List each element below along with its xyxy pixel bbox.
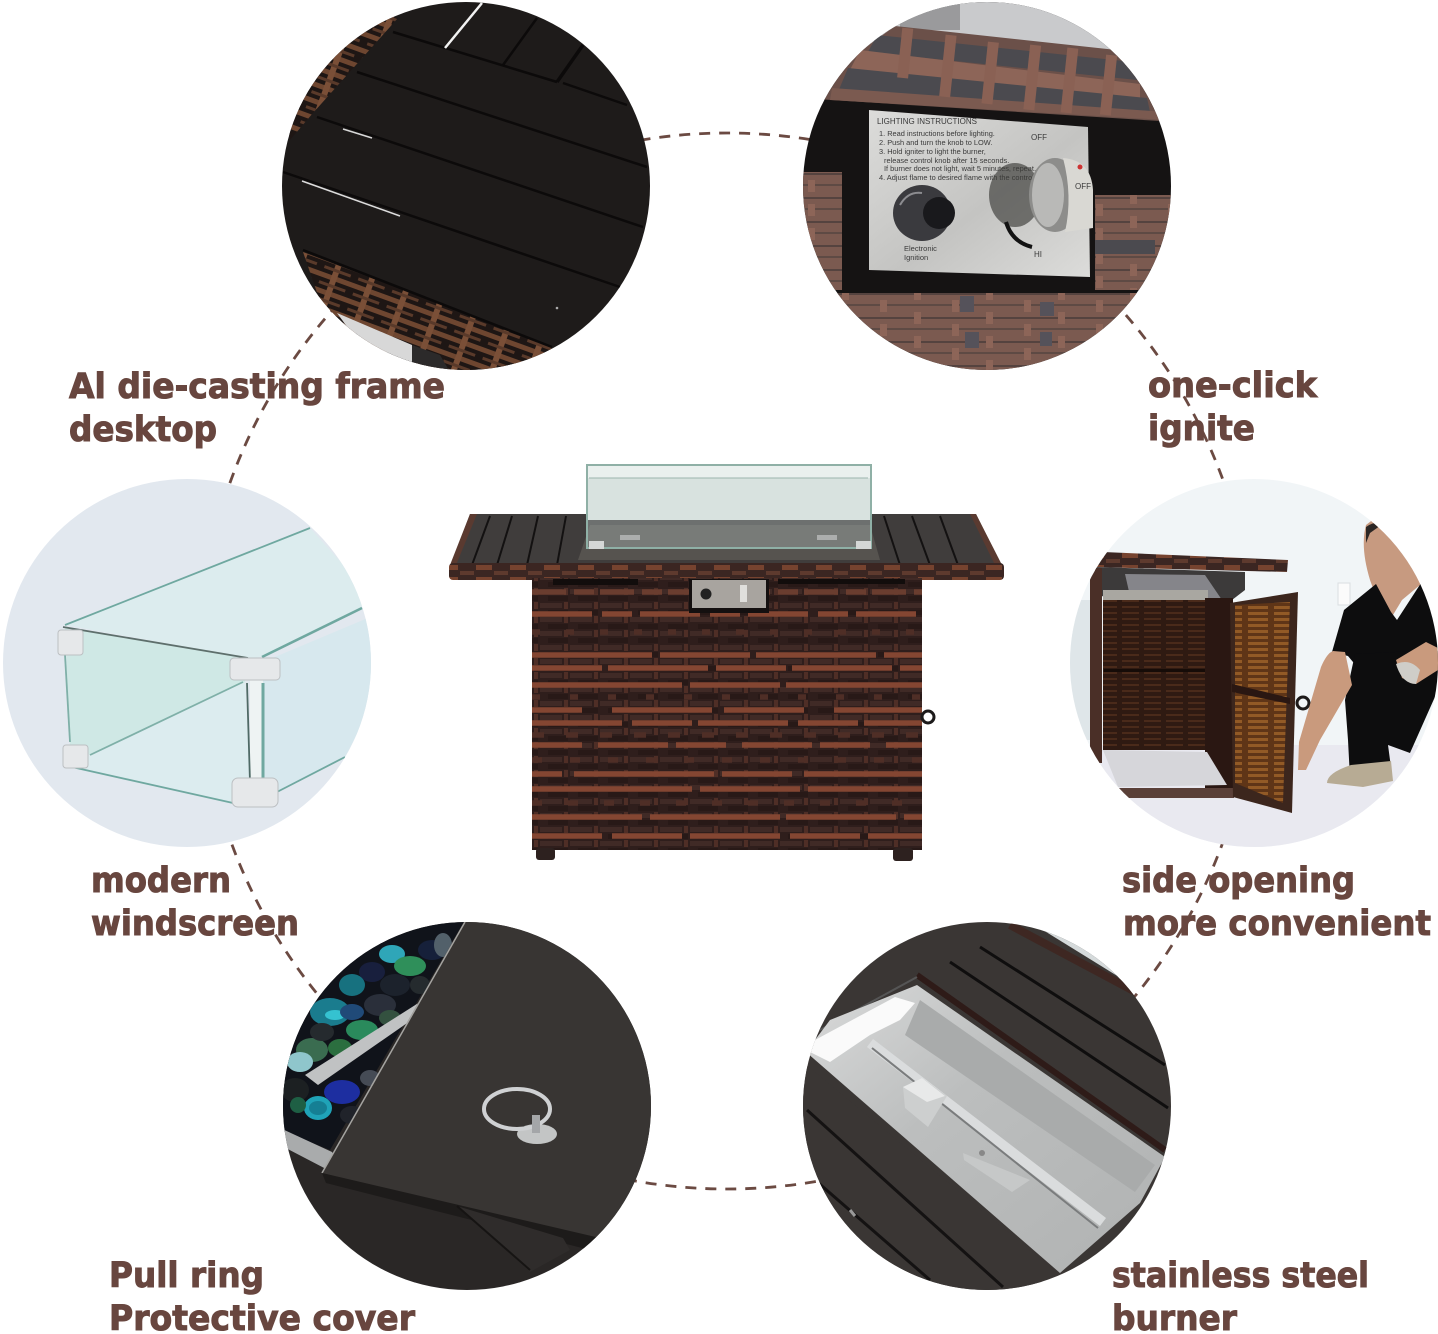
photo: one-click ignition panel bbox=[800, 0, 1175, 375]
lighting instructions plate text: LIGHTING INSTRUCTIONS bbox=[877, 117, 977, 126]
upper wicker bbox=[824, 26, 1159, 121]
label: stainless steel burner: stainless steel bbox=[1112, 1256, 1369, 1296]
control dial: OFF bbox=[1075, 182, 1091, 191]
lighting instructions plate text: Electronic bbox=[904, 244, 937, 253]
photo: side opening door bbox=[1065, 475, 1438, 850]
lighting instructions plate text: If burner does not light, wait 5 minutes, repeat. bbox=[884, 164, 1036, 173]
corner clips bbox=[58, 630, 280, 807]
lighting instructions plate text: 1. Read instructions before lighting. bbox=[879, 129, 995, 138]
lighting instructions plate text: 4. Adjust flame to desired flame with the control. bbox=[879, 173, 1036, 182]
control dial bbox=[989, 158, 1093, 247]
lighting instructions plate text: Ignition bbox=[904, 253, 928, 262]
pull ring bbox=[484, 1089, 557, 1144]
table top slats bbox=[450, 514, 1002, 567]
label: side opening more convenient: side opening bbox=[1122, 861, 1355, 901]
label: side opening more convenient bbox=[1122, 861, 1431, 944]
lighting instructions plate text bbox=[877, 117, 1047, 262]
central product: wicker fire pit table bbox=[449, 465, 1004, 861]
control panel bbox=[689, 579, 769, 613]
person bbox=[1298, 500, 1438, 787]
glass faces bbox=[65, 564, 371, 790]
lighting instructions plate text: HI bbox=[1034, 250, 1042, 259]
label: Al die-casting frame desktop bbox=[69, 367, 445, 450]
label: one-click ignite: one-click bbox=[1148, 366, 1318, 406]
lighting instructions plate text: 3. Hold igniter to light the burner, bbox=[879, 147, 986, 156]
burner tube bbox=[870, 1043, 1103, 1228]
right foot bbox=[893, 848, 913, 861]
glass windscreen on table bbox=[587, 465, 871, 549]
lighting instructions plate text: OFF bbox=[1031, 133, 1047, 142]
wicker body bbox=[532, 578, 922, 850]
label: Pull ring Protective cover: Pull ring bbox=[109, 1256, 264, 1296]
label: Al die-casting frame desktop: desktop bbox=[69, 410, 217, 450]
ignition button bbox=[893, 185, 955, 241]
dashed connecting ring bbox=[199, 133, 1255, 1189]
left foot bbox=[536, 848, 555, 860]
label: modern windscreen: modern bbox=[91, 861, 231, 901]
lighting instructions plate text: 2. Push and turn the knob to LOW. bbox=[879, 138, 992, 147]
photo: aluminium die-cast table top bbox=[280, 0, 652, 375]
photo: pull ring protective cover bbox=[280, 920, 655, 1295]
cabinet bbox=[1090, 552, 1309, 813]
lighting instructions plate text: release control knob after 15 seconds. bbox=[884, 156, 1009, 165]
label: Al die-casting frame desktop: Al die-casting frame bbox=[69, 367, 445, 407]
label: one-click ignite bbox=[1148, 366, 1318, 449]
label: Pull ring Protective cover bbox=[109, 1256, 416, 1334]
photo: stainless steel burner bbox=[800, 920, 1180, 1300]
label: one-click ignite: ignite bbox=[1148, 409, 1255, 449]
label: modern windscreen bbox=[91, 861, 299, 944]
label: stainless steel burner bbox=[1112, 1256, 1369, 1334]
label: modern windscreen: windscreen bbox=[91, 904, 299, 944]
glass beads bbox=[281, 933, 452, 1124]
table front edge bbox=[449, 563, 1004, 580]
photo: glass windscreen bbox=[0, 475, 375, 850]
door ring bbox=[922, 711, 934, 723]
